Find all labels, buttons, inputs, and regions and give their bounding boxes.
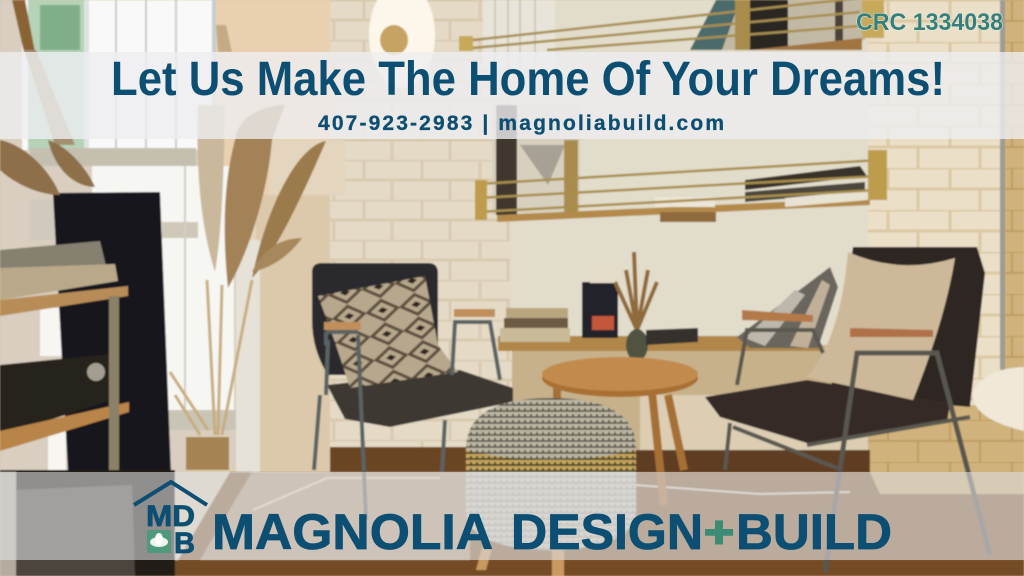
- turntable and shelving: [0, 241, 129, 472]
- brand name: MAGNOLIA: [212, 504, 493, 560]
- marble side table: [973, 367, 1024, 431]
- upper book shelf: [459, 0, 884, 68]
- brand name: [212, 504, 892, 560]
- right chair: [705, 247, 990, 572]
- left chair: [312, 263, 513, 520]
- dark object bottom left: [16, 485, 135, 576]
- bottom banner: [0, 472, 1024, 560]
- wall lamp: [369, 0, 435, 88]
- left pampas grass: [0, 0, 95, 195]
- center pampas grass: [170, 25, 326, 435]
- round side table: [542, 357, 698, 505]
- brand name: BUILD: [736, 504, 892, 560]
- floor: [0, 470, 1024, 576]
- woven vase: [172, 436, 253, 560]
- license number: CRC 1334038: [856, 9, 1003, 36]
- lower wall shelf with books: [475, 105, 887, 222]
- speaker: [53, 192, 171, 472]
- logo: MDB house mark: [134, 482, 207, 560]
- brand name: +: [704, 508, 734, 557]
- top banner: [0, 52, 1024, 139]
- woven pouf: [466, 398, 636, 576]
- window with foliage: [22, 0, 260, 472]
- icon: magnolia flower tile: [147, 530, 171, 553]
- logo letter B: B: [174, 527, 195, 560]
- brand name: DESIGN: [511, 504, 703, 560]
- contact line: 407-923-2983 | magnoliabuild.com: [318, 112, 724, 135]
- logo letters MD: MD: [146, 500, 195, 533]
- icon: roof: [134, 482, 207, 505]
- low shelf, books and vase: [498, 252, 838, 361]
- heading: Let Us Make The Home Of Your Dreams!: [111, 53, 945, 106]
